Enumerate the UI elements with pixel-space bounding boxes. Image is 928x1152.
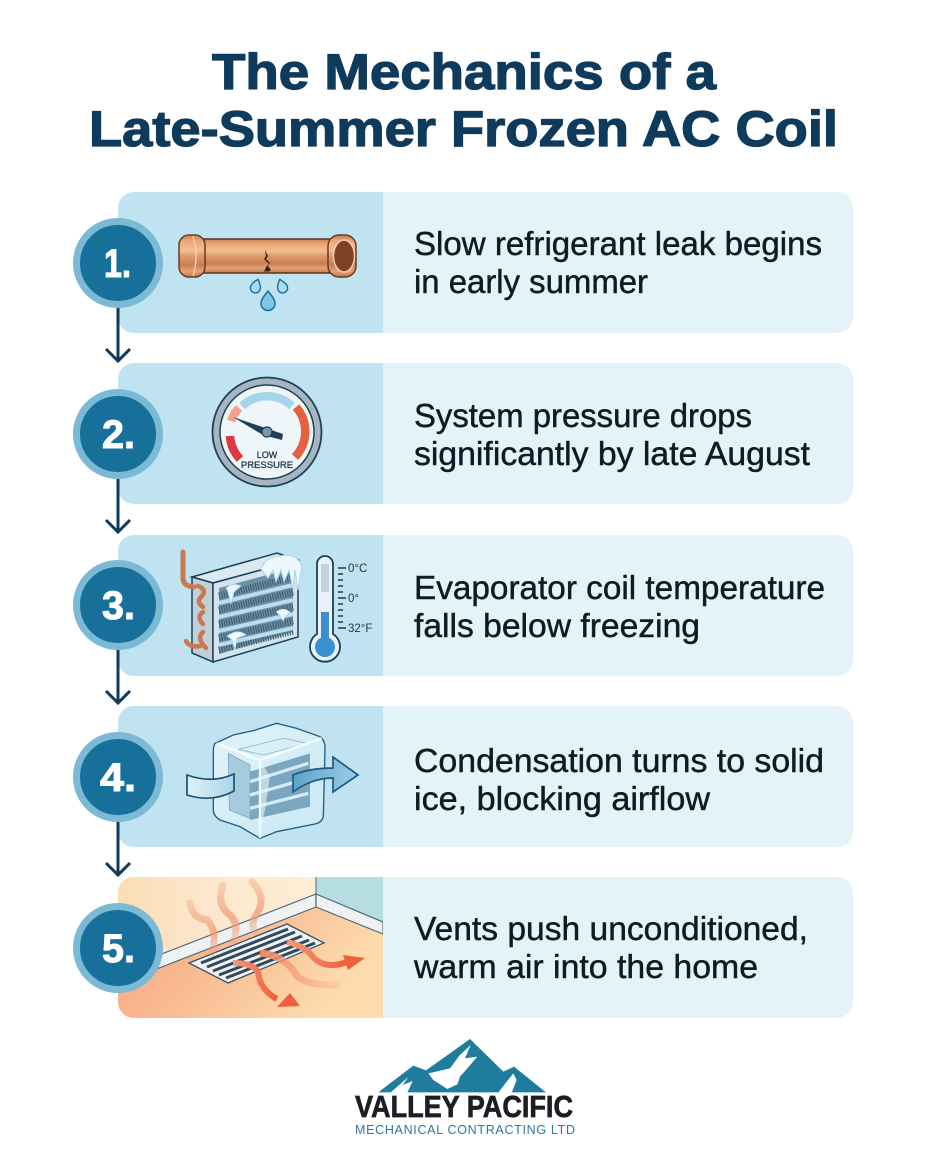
arrow: step 2 to 3 [106, 479, 130, 532]
icon: coil encased in ice block [213, 723, 325, 838]
icon: mountain [378, 1039, 546, 1093]
text: step 4: ice, blocking airflow [414, 780, 710, 817]
panel: step 4 [118, 706, 853, 847]
arrow: step 1 to 2 [106, 308, 130, 361]
badge: 2 [76, 392, 160, 476]
icon: leaking copper pipe [179, 235, 356, 310]
panel: step 5 [118, 877, 853, 1018]
text: step 4 [414, 742, 824, 817]
icon: low pressure gauge: LOW [257, 450, 278, 460]
illustration: warm air from floor vent [118, 877, 383, 1018]
icon: thermometer [310, 556, 372, 662]
text: step 5: Vents push unconditioned, [414, 910, 808, 947]
badge: 3 [76, 564, 160, 646]
text: step 1: in early summer [414, 263, 648, 300]
icon: thermometer: 0° [348, 593, 359, 605]
arrow: airflow out [293, 757, 358, 792]
text: step 2: System pressure drops [414, 397, 752, 434]
text: step 4: Condensation turns to solid [414, 742, 824, 779]
badge: 5 [76, 906, 160, 990]
icon: low pressure gauge: PRESSURE [241, 460, 293, 471]
badge: 5: 5. [102, 927, 135, 971]
text: step 5 [413, 910, 808, 985]
badge: 1: 1. [104, 242, 131, 286]
text: step 3: falls below freezing [414, 607, 700, 644]
text: step 2 [414, 397, 810, 472]
text: company tagline: MECHANICAL CONTRACTING LTD [355, 1123, 575, 1137]
badge: 3: 3. [102, 584, 135, 628]
panel: step 1 [118, 192, 853, 333]
badge: 4: 4. [100, 756, 136, 800]
title: The Mechanics of a [212, 44, 717, 100]
badge: 4 [76, 736, 160, 818]
badge: 1 [76, 222, 160, 304]
icon: thermometer: 0°C [348, 563, 367, 575]
icon: frozen evaporator coil [183, 552, 302, 662]
text: company name: VALLEY PACIFIC [355, 1089, 573, 1124]
text: step 3 [414, 569, 825, 644]
text: step 5: warm air into the home [413, 948, 758, 985]
text: step 1 [414, 225, 822, 300]
text: step 3: Evaporator coil temperature [414, 569, 825, 606]
panel: step 3 [118, 535, 853, 676]
text: step 1: Slow refrigerant leak begins [414, 225, 822, 262]
panel: step 2 [118, 363, 853, 504]
logo: Valley Pacific [355, 1039, 575, 1137]
arrow: step 3 to 4 [106, 650, 130, 703]
arrow: step 4 to 5 [106, 822, 130, 875]
arrow: airflow blocked [187, 774, 234, 798]
badge: 2: 2. [102, 413, 135, 457]
title [89, 44, 838, 157]
title: Late-Summer Frozen AC Coil [89, 101, 838, 157]
icon: low pressure gauge [212, 378, 322, 486]
text: step 2: significantly by late August [414, 435, 810, 472]
icon: thermometer: 32°F [348, 623, 372, 635]
